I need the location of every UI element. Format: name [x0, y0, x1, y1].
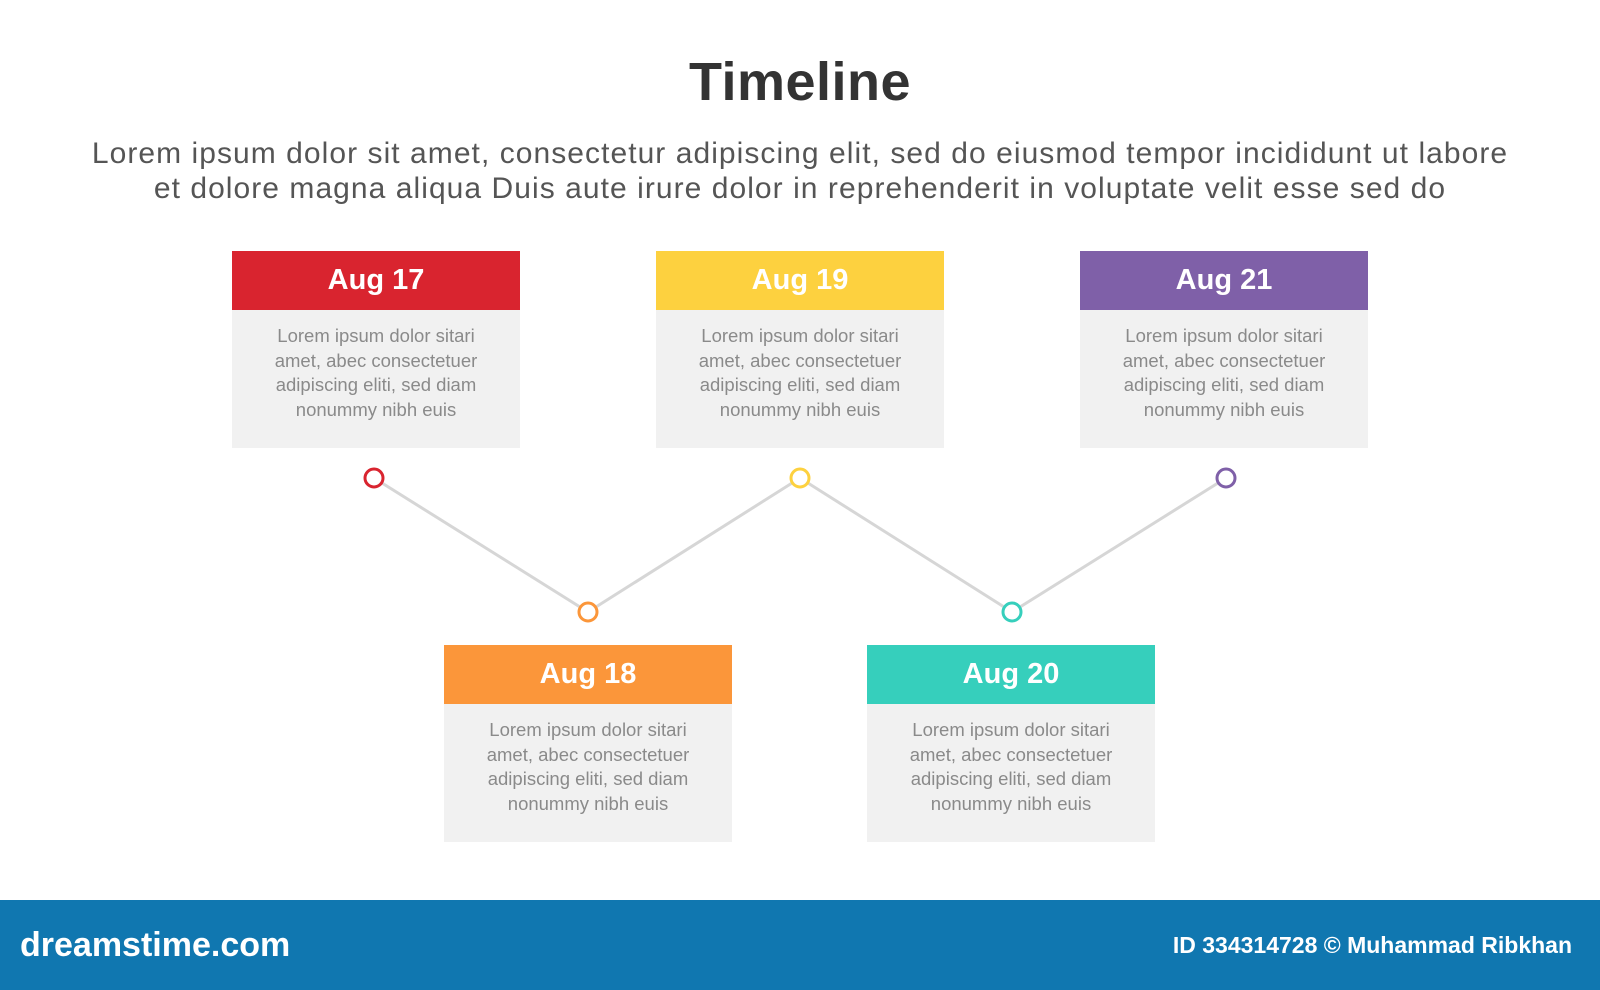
card: Aug 21	[1080, 251, 1368, 448]
card: Aug 20: amet, abec consectetuer	[910, 744, 1112, 764]
card: Aug 19: nonummy nibh euis	[720, 398, 880, 420]
subtitle: Lorem ipsum dolor sit amet, consectetur adipiscing elit, sed do eiusmod tempor incididunt ut labore	[92, 137, 1508, 170]
card: Aug 17: Lorem ipsum dolor sitari	[277, 325, 475, 346]
card: Aug 20: nonummy nibh euis	[931, 792, 1091, 814]
card: Aug 18: Aug 18	[540, 658, 636, 690]
title: Timeline	[689, 52, 911, 112]
card: Aug 19: Aug 19	[752, 264, 848, 296]
card: Aug 19: Lorem ipsum dolor sitari	[701, 325, 899, 346]
card: Aug 17: adipiscing eliti, sed diam	[276, 374, 476, 395]
card: Aug 17	[232, 251, 520, 448]
card: Aug 21: Aug 21	[1176, 264, 1272, 296]
card: Aug 18	[444, 645, 732, 842]
card: Aug 20: Lorem ipsum dolor sitari	[912, 719, 1110, 740]
footer logo: dreamstime.com	[20, 926, 290, 964]
subtitle: et dolore magna aliqua Duis aute irure dolor in reprehenderit in voluptate velit esse sed do	[154, 172, 1446, 205]
card: Aug 20	[867, 645, 1155, 842]
card: Aug 20: Aug 20	[963, 658, 1059, 690]
card: Aug 19	[656, 251, 944, 448]
card: Aug 18: nonummy nibh euis	[508, 792, 668, 814]
card: Aug 20: adipiscing eliti, sed diam	[911, 768, 1111, 789]
card: Aug 18: Lorem ipsum dolor sitari	[489, 719, 687, 740]
card: Aug 17: amet, abec consectetuer	[275, 350, 477, 370]
card: Aug 19: adipiscing eliti, sed diam	[700, 374, 900, 395]
footer bar	[0, 900, 1600, 990]
card: Aug 21: Lorem ipsum dolor sitari	[1125, 325, 1323, 346]
card: Aug 21: amet, abec consectetuer	[1123, 350, 1325, 370]
card: Aug 18: adipiscing eliti, sed diam	[488, 768, 688, 789]
subtitle	[92, 137, 1508, 205]
card: Aug 17: Aug 17	[328, 264, 424, 296]
card: Aug 17: nonummy nibh euis	[296, 398, 456, 420]
card: Aug 19: amet, abec consectetuer	[699, 350, 901, 370]
card: Aug 21: adipiscing eliti, sed diam	[1124, 374, 1324, 395]
card: Aug 21: nonummy nibh euis	[1144, 398, 1304, 420]
card: Aug 18: amet, abec consectetuer	[487, 744, 689, 764]
footer credit: ID 334314728 © Muhammad Ribkhan	[1173, 932, 1572, 958]
